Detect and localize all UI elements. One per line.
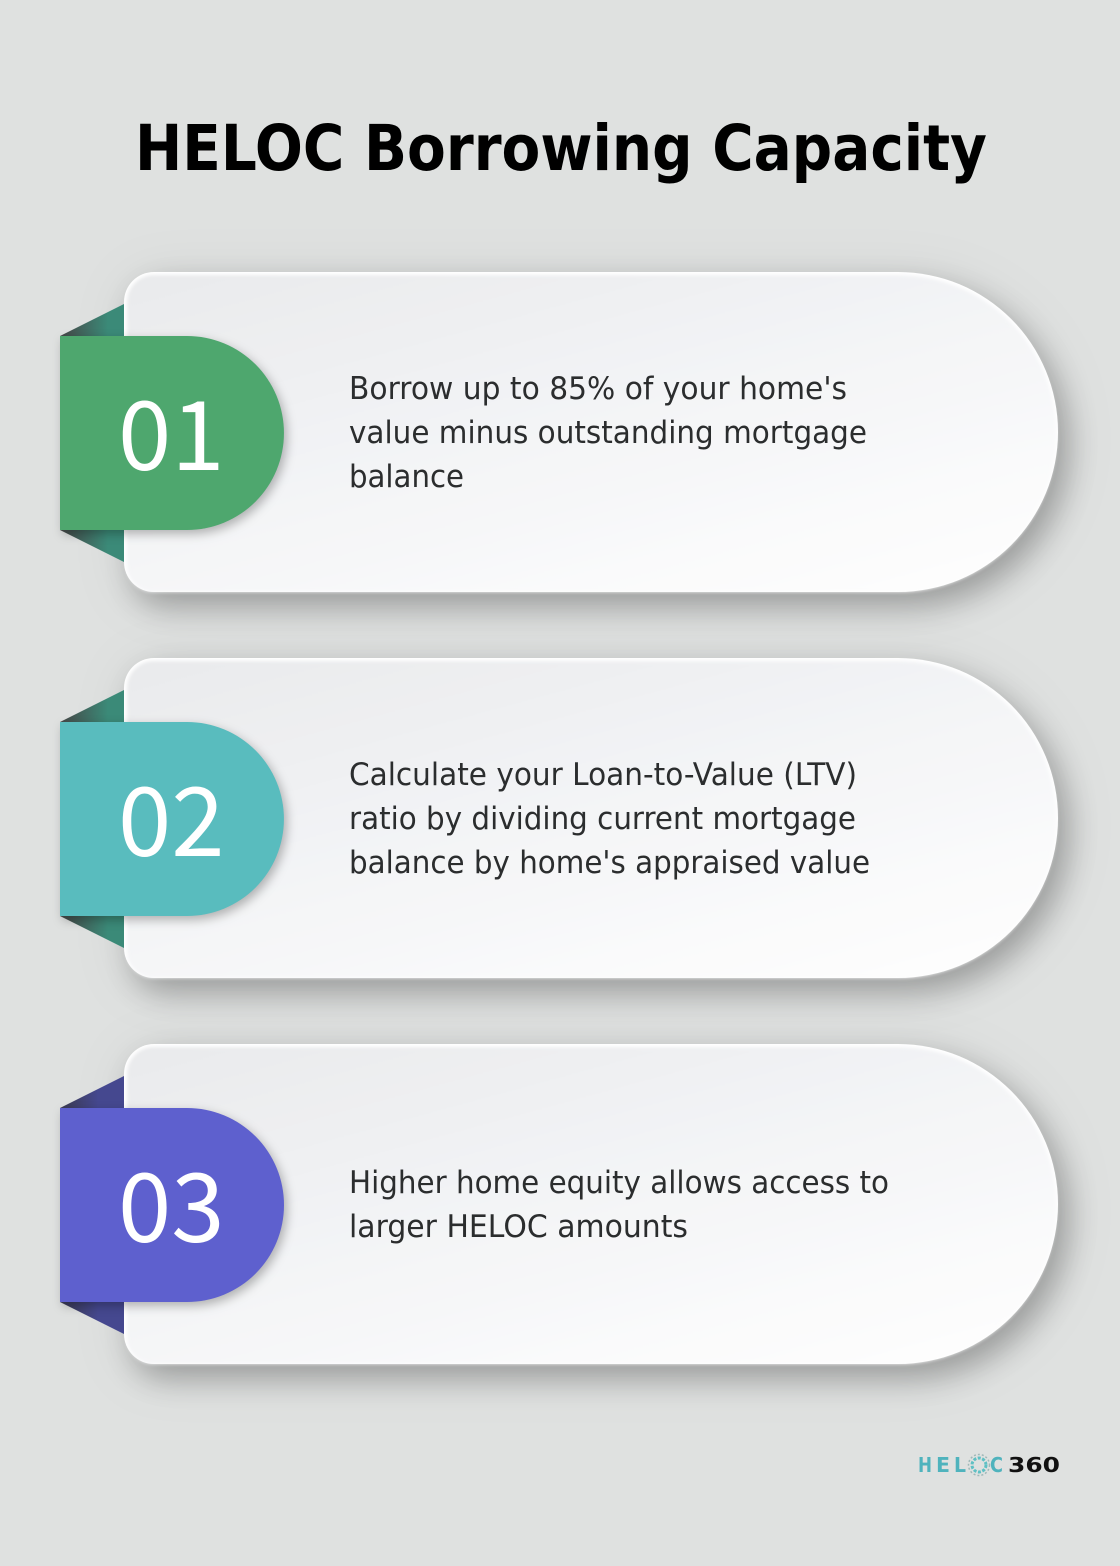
step 2 text: balance by home's appraised value bbox=[349, 845, 870, 881]
number 03: 03 bbox=[118, 1131, 225, 1270]
step 2 text: ratio by dividing current mortgage bbox=[349, 801, 856, 837]
step 2 text bbox=[349, 757, 870, 881]
title: HELOC Borrowing Capacity bbox=[135, 112, 987, 185]
step 1 text: Borrow up to 85% of your home's bbox=[349, 371, 847, 407]
logo: H bbox=[918, 1453, 932, 1477]
card background 1 bbox=[124, 272, 1058, 592]
logo: E bbox=[936, 1453, 950, 1477]
panel: step 3 bbox=[60, 1044, 1058, 1364]
panel: step 1 bbox=[60, 272, 1058, 592]
card background 3 bbox=[124, 1044, 1058, 1364]
logo bbox=[918, 1453, 1060, 1477]
ribbon folds 2 bbox=[60, 690, 124, 948]
number badge 3 bbox=[60, 1108, 284, 1302]
logo: C bbox=[990, 1453, 1003, 1477]
step 1 text bbox=[349, 371, 867, 495]
card background 2 bbox=[124, 658, 1058, 978]
panel: step 2 bbox=[60, 658, 1058, 978]
number 02: 02 bbox=[118, 745, 225, 884]
step 2 text: Calculate your Loan-to-Value (LTV) bbox=[349, 757, 857, 793]
number badge 2 bbox=[60, 722, 284, 916]
step 3 text: Higher home equity allows access to bbox=[349, 1165, 889, 1201]
logo: 360 bbox=[1008, 1453, 1060, 1477]
step 1 text: balance bbox=[349, 459, 464, 495]
number 01: 01 bbox=[118, 359, 225, 498]
step 1 text: value minus outstanding mortgage bbox=[349, 415, 867, 451]
logo: L bbox=[954, 1453, 966, 1477]
step 3 text bbox=[349, 1165, 889, 1245]
ribbon folds 3 bbox=[60, 1076, 124, 1334]
ribbon folds 1 bbox=[60, 304, 124, 562]
icon: logo swirl bbox=[968, 1454, 990, 1476]
step 3 text: larger HELOC amounts bbox=[349, 1209, 688, 1245]
number badge 1 bbox=[60, 336, 284, 530]
